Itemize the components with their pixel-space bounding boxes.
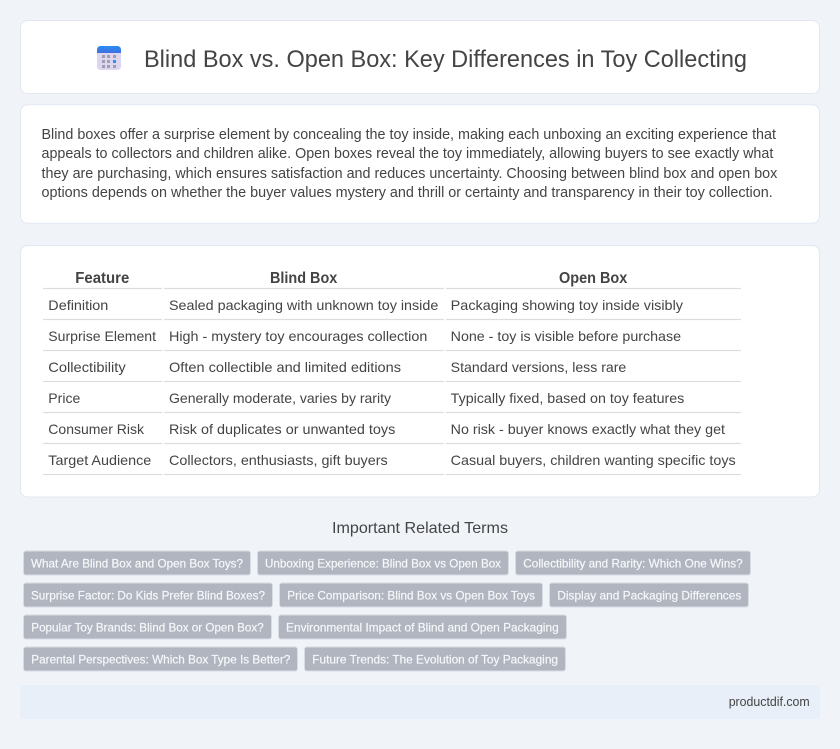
table row: collectibility: Collectibility (48, 359, 126, 375)
tag: Price Comparison: Blind Box vs Open Box Toys (287, 588, 535, 602)
table row: surprise element (48, 328, 681, 344)
tag (550, 583, 748, 607)
tag (516, 551, 750, 575)
tag: Unboxing Experience: Blind Box vs Open Box (265, 556, 501, 570)
table row: definition: Packaging showing toy inside visibly (451, 297, 683, 313)
footer: productdif.com (729, 695, 810, 709)
tag: Future Trends: The Evolution of Toy Packaging (312, 652, 558, 666)
tag (24, 583, 272, 607)
related term tags (24, 551, 750, 671)
table row: collectibility: Often collectible and limited editions (169, 359, 401, 375)
table header row (75, 270, 627, 287)
table row: definition: Sealed packaging with unknown toy inside (169, 297, 439, 313)
table row: collectibility: Standard versions, less rare (451, 359, 627, 375)
tag (278, 615, 566, 639)
text block: description: options depends on whether the buyer values mystery and thrill or certainty and transparency in their toy collection. (42, 185, 773, 201)
tag: Surprise Factor: Do Kids Prefer Blind Boxes? (31, 588, 265, 602)
text block: description: they are purchasing, which ensures satisfaction and reduces uncertainty. Choosing between blind box and open box (42, 166, 778, 182)
table header row: Feature (75, 270, 129, 287)
table row: surprise element: None - toy is visible before purchase (451, 328, 681, 344)
tag: Collectibility and Rarity: Which One Wins? (523, 556, 743, 570)
table row: definition (48, 297, 683, 313)
table row: consumer risk: Risk of duplicates or unwanted toys (169, 421, 395, 437)
tag: Environmental Impact of Blind and Open Packaging (286, 620, 559, 634)
tag: Display and Packaging Differences (557, 588, 741, 602)
tag (24, 647, 298, 671)
text block: description: Blind boxes offer a surprise element by concealing the toy inside, making each unboxing an exciting experience that (42, 127, 776, 143)
table row: surprise element: Surprise Element (48, 328, 156, 344)
tag: What Are Blind Box and Open Box Toys? (31, 556, 243, 570)
table row: target audience: Casual buyers, children wanting specific toys (451, 452, 736, 468)
tag (258, 551, 508, 575)
table row: target audience: Collectors, enthusiasts, gift buyers (169, 452, 388, 468)
title: Blind Box vs. Open Box: Key Differences in Toy Collecting (144, 46, 747, 73)
table row: price: Generally moderate, varies by rarity (169, 390, 391, 406)
table row: consumer risk: Consumer Risk (48, 421, 145, 437)
tag (24, 615, 272, 639)
heading: related terms: Important Related Terms (332, 520, 508, 537)
table row: consumer risk: No risk - buyer knows exactly what they get (451, 421, 725, 437)
table row: collectibility (48, 359, 627, 375)
table row: definition: Definition (48, 297, 108, 313)
tag (24, 551, 250, 575)
table row: price: Typically fixed, based on toy features (451, 390, 684, 406)
tag: Parental Perspectives: Which Box Type Is Better? (31, 652, 291, 666)
table row: target audience (48, 452, 736, 468)
tag: Popular Toy Brands: Blind Box or Open Box? (31, 620, 264, 634)
table row: price: Price (48, 390, 81, 406)
table row: price (48, 390, 684, 406)
text block: description (42, 127, 778, 201)
table header row: Open Box (559, 270, 627, 287)
table row: surprise element: High - mystery toy encourages collection (169, 328, 427, 344)
table header row: Blind Box (270, 270, 337, 287)
panel: comparison table (20, 246, 820, 497)
table row: target audience: Target Audience (48, 452, 152, 468)
table row: consumer risk (48, 421, 725, 437)
footer (20, 685, 820, 719)
panel: description (20, 105, 820, 223)
tag (304, 647, 566, 671)
tag (280, 583, 542, 607)
icon: calendar (97, 46, 121, 70)
panel: header (20, 20, 820, 94)
text block: description: appeals to collectors and children alike. Open boxes reveal the toy immediately, allowing buyers to see exactly what (42, 146, 773, 162)
